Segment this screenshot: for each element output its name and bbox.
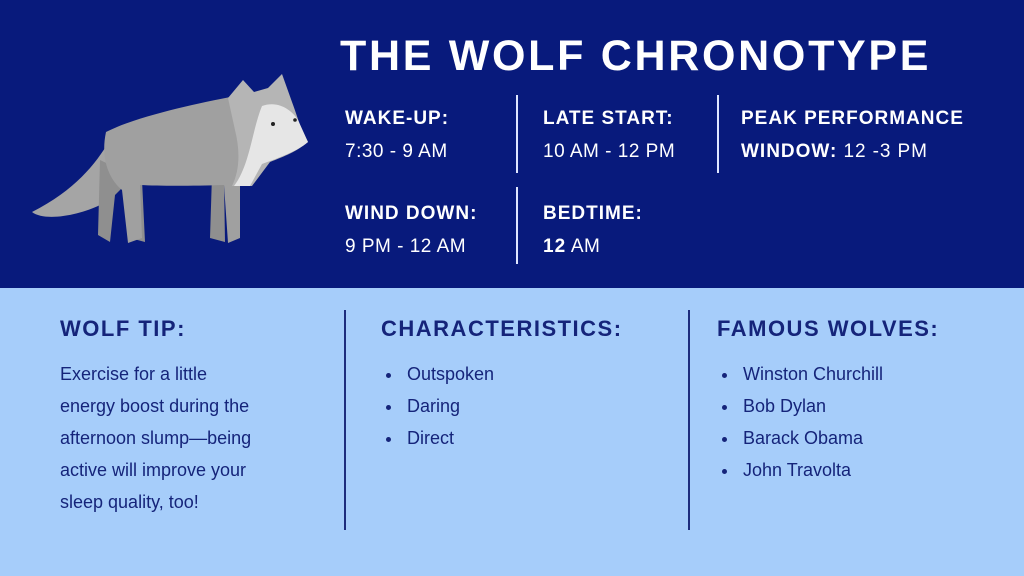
schedule: wind down: 9 PM - 12 AM <box>345 236 466 257</box>
schedule: late start <box>543 108 675 162</box>
panel: wolf tip: Exercise for a little <box>60 364 207 384</box>
schedule: bedtime <box>543 203 643 257</box>
panel: famous wolves <box>717 316 939 480</box>
title: THE WOLF CHRONOTYPE <box>340 32 931 80</box>
panel: famous wolves: John Travolta <box>743 460 851 480</box>
panel: characteristics: Daring <box>407 396 460 416</box>
schedule: bedtime: 12 AM <box>543 236 600 257</box>
panel: characteristics: Direct <box>407 428 454 448</box>
panel: characteristics <box>381 316 623 448</box>
panel: wolf tip: active will improve your <box>60 460 246 480</box>
top band <box>0 0 1024 288</box>
schedule: wake-up: 7:30 - 9 AM <box>345 141 448 162</box>
schedule: peak <box>741 108 964 162</box>
panel: wolf tip: sleep quality, too! <box>60 492 199 512</box>
schedule: wind down: WIND DOWN: <box>345 203 477 224</box>
schedule: bedtime: BEDTIME: <box>543 203 643 224</box>
panel: wolf tip: energy boost during the <box>60 396 249 416</box>
schedule: wind down <box>345 203 477 257</box>
schedule: peak: PEAK PERFORMANCE <box>741 108 964 129</box>
panel: characteristics: CHARACTERISTICS: <box>381 316 623 341</box>
panel: wolf tip: WOLF TIP: <box>60 316 186 341</box>
panel: famous wolves: FAMOUS WOLVES: <box>717 316 939 341</box>
panel: famous wolves: Winston Churchill <box>743 364 883 384</box>
schedule: late start: LATE START: <box>543 108 674 129</box>
schedule: peak: WINDOW: 12 -3 PM <box>741 141 928 162</box>
schedule: late start: 10 AM - 12 PM <box>543 141 675 162</box>
panel: wolf tip: afternoon slump—being <box>60 428 251 448</box>
icon: wolf <box>32 74 308 243</box>
schedule: wake-up: WAKE-UP: <box>345 108 449 129</box>
schedule: wake-up <box>345 108 449 162</box>
panel: wolf tip <box>60 316 251 512</box>
panel: characteristics: Outspoken <box>407 364 494 384</box>
panel: famous wolves: Barack Obama <box>743 428 863 448</box>
panel: famous wolves: Bob Dylan <box>743 396 826 416</box>
